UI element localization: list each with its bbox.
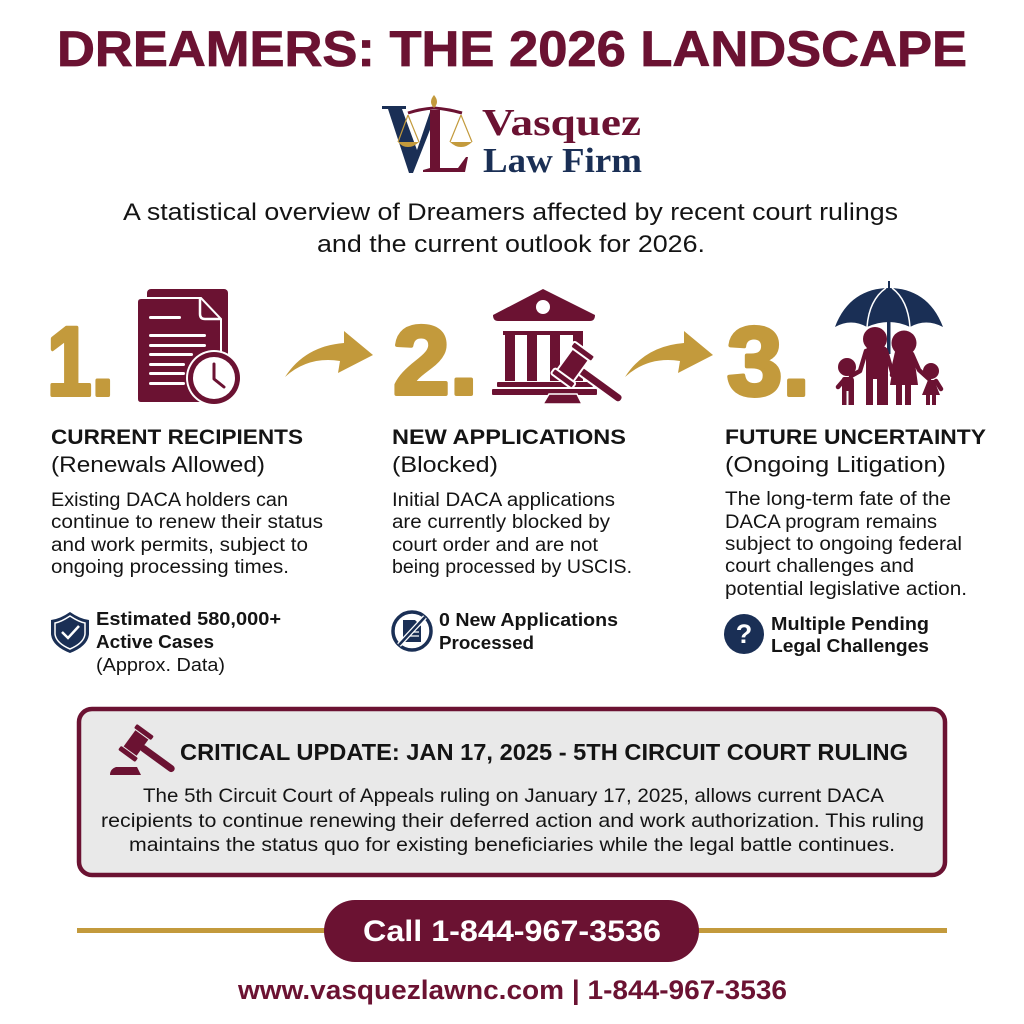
- heading: FUTURE UNCERTAINTY: [725, 425, 986, 449]
- callout body: The 5th Circuit Court of Appeals ruling on January 17, 2025, allows current DACA: [143, 785, 884, 807]
- statistic: [439, 610, 618, 653]
- heading: CURRENT RECIPIENTS: [51, 425, 303, 449]
- statistic: Legal Challenges: [771, 636, 929, 656]
- body text: [51, 490, 323, 578]
- body text: ongoing processing times.: [51, 557, 289, 578]
- panel: current recipients: [47, 289, 323, 675]
- body text: The long-term fate of the: [725, 489, 951, 510]
- statistic: Multiple Pending: [771, 614, 929, 634]
- statistic: 0 New Applications: [439, 610, 618, 630]
- body text: DACA program remains: [725, 512, 937, 533]
- statistic: Processed: [439, 633, 534, 653]
- divider line: [77, 928, 947, 933]
- call button: [324, 900, 699, 962]
- body text: Existing DACA holders can: [51, 490, 288, 511]
- body text: Initial DACA applications: [392, 490, 615, 511]
- body text: being processed by USCIS.: [392, 557, 632, 578]
- statistic: [771, 614, 929, 656]
- icon: gavel: [110, 724, 183, 784]
- statistic: Estimated 580,000+: [96, 609, 281, 629]
- statistic: (Approx. Data): [96, 655, 225, 675]
- number 2: 2.: [393, 306, 478, 415]
- number 1: 1.: [47, 307, 114, 416]
- footer contact: www.vasquezlawnc.com | 1-844-967-3536: [237, 975, 787, 1005]
- panel: future uncertainty: [724, 281, 986, 656]
- body text: continue to renew their status: [51, 512, 323, 533]
- arrow 2: [625, 331, 713, 377]
- callout: critical update: [79, 709, 945, 875]
- icon: question mark: [724, 614, 764, 654]
- icon: no documents: [393, 612, 431, 650]
- call button: Call 1-844-967-3536: [363, 915, 661, 948]
- statistic: Active Cases: [96, 632, 214, 652]
- heading: NEW APPLICATIONS: [392, 425, 626, 449]
- subheading: (Ongoing Litigation): [725, 452, 946, 477]
- body text: [392, 490, 632, 578]
- body text: and work permits, subject to: [51, 535, 308, 556]
- icon: family under umbrella: [835, 281, 943, 405]
- logo wordmark top: Vasquez: [482, 102, 641, 144]
- callout heading: CRITICAL UPDATE: JAN 17, 2025 - 5TH CIRCUIT COURT RULING: [180, 739, 908, 765]
- subheading: (Blocked): [392, 452, 498, 477]
- panel: new applications: [392, 289, 633, 653]
- number 3: 3.: [727, 307, 810, 416]
- title: DREAMERS: THE 2026 LANDSCAPE: [57, 21, 967, 77]
- logo: Vasquez Law Firm: [382, 95, 642, 180]
- icon: document with clock: [137, 289, 242, 406]
- logo mark: [382, 95, 472, 173]
- arrow 1: [285, 331, 373, 377]
- icon: question mark: ?: [736, 619, 752, 649]
- body text: potential legislative action.: [725, 579, 967, 600]
- body text: subject to ongoing federal: [725, 534, 962, 555]
- callout body: maintains the status quo for existing beneficiaries while the legal battle continues.: [129, 834, 895, 856]
- statistic: [96, 609, 281, 675]
- body text: are currently blocked by: [392, 512, 611, 533]
- body text: court challenges and: [725, 556, 914, 577]
- logo wordmark bottom: Law Firm: [483, 141, 642, 180]
- callout body: recipients to continue renewing their deferred action and work authorization. This ruling: [101, 810, 924, 832]
- callout body: [101, 785, 924, 856]
- subtitle: [123, 199, 898, 258]
- body text: [725, 489, 967, 600]
- body text: court order and are not: [392, 535, 599, 556]
- subtitle: A statistical overview of Dreamers affected by recent court rulings: [123, 199, 898, 226]
- icon: courthouse with gavel: [492, 289, 633, 416]
- subtitle: and the current outlook for 2026.: [317, 231, 705, 258]
- subheading: (Renewals Allowed): [51, 452, 265, 477]
- icon: shield: [51, 612, 89, 653]
